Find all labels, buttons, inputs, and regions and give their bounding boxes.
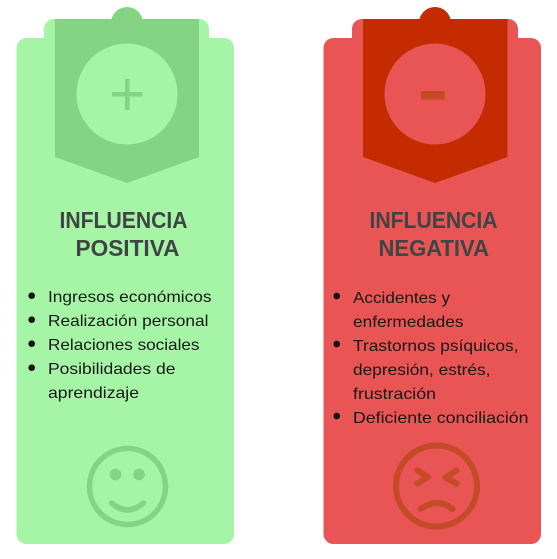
- bullet list: frustración: [353, 386, 436, 403]
- bullet list: Posibilidades de: [48, 361, 176, 378]
- panel: influencia negativa: [324, 7, 541, 544]
- heading: INFLUENCIA: [370, 207, 498, 233]
- heading: [370, 207, 498, 261]
- heading: INFLUENCIA: [60, 207, 188, 233]
- icon: plus in circle: [76, 44, 178, 144]
- icon: frowning face: [396, 446, 477, 526]
- bullet list: enfermedades: [353, 314, 464, 331]
- heading: NEGATIVA: [378, 235, 489, 261]
- card background: [324, 19, 541, 544]
- bullet list: Trastornos psíquicos,: [353, 338, 518, 355]
- bullet list: depresión, estrés,: [353, 362, 490, 379]
- heading: POSITIVA: [76, 235, 180, 261]
- bullet list: Deficiente conciliación: [353, 410, 528, 427]
- ribbon: [55, 7, 199, 183]
- heading: [60, 207, 188, 261]
- bullet list: Realización personal: [48, 313, 208, 330]
- icon: smiling face: [90, 448, 166, 524]
- card background: [16, 19, 234, 544]
- bullet list: Ingresos económicos: [48, 289, 212, 306]
- bullet list: Relaciones sociales: [48, 337, 200, 354]
- icon: minus in circle: [384, 44, 486, 144]
- bullet list: Accidentes y: [353, 290, 450, 307]
- bullet list: aprendizaje: [48, 385, 139, 402]
- ribbon: [363, 7, 508, 183]
- bullet list: [333, 290, 528, 427]
- bullet list: [28, 289, 212, 402]
- panel: influencia positiva: [16, 7, 234, 544]
